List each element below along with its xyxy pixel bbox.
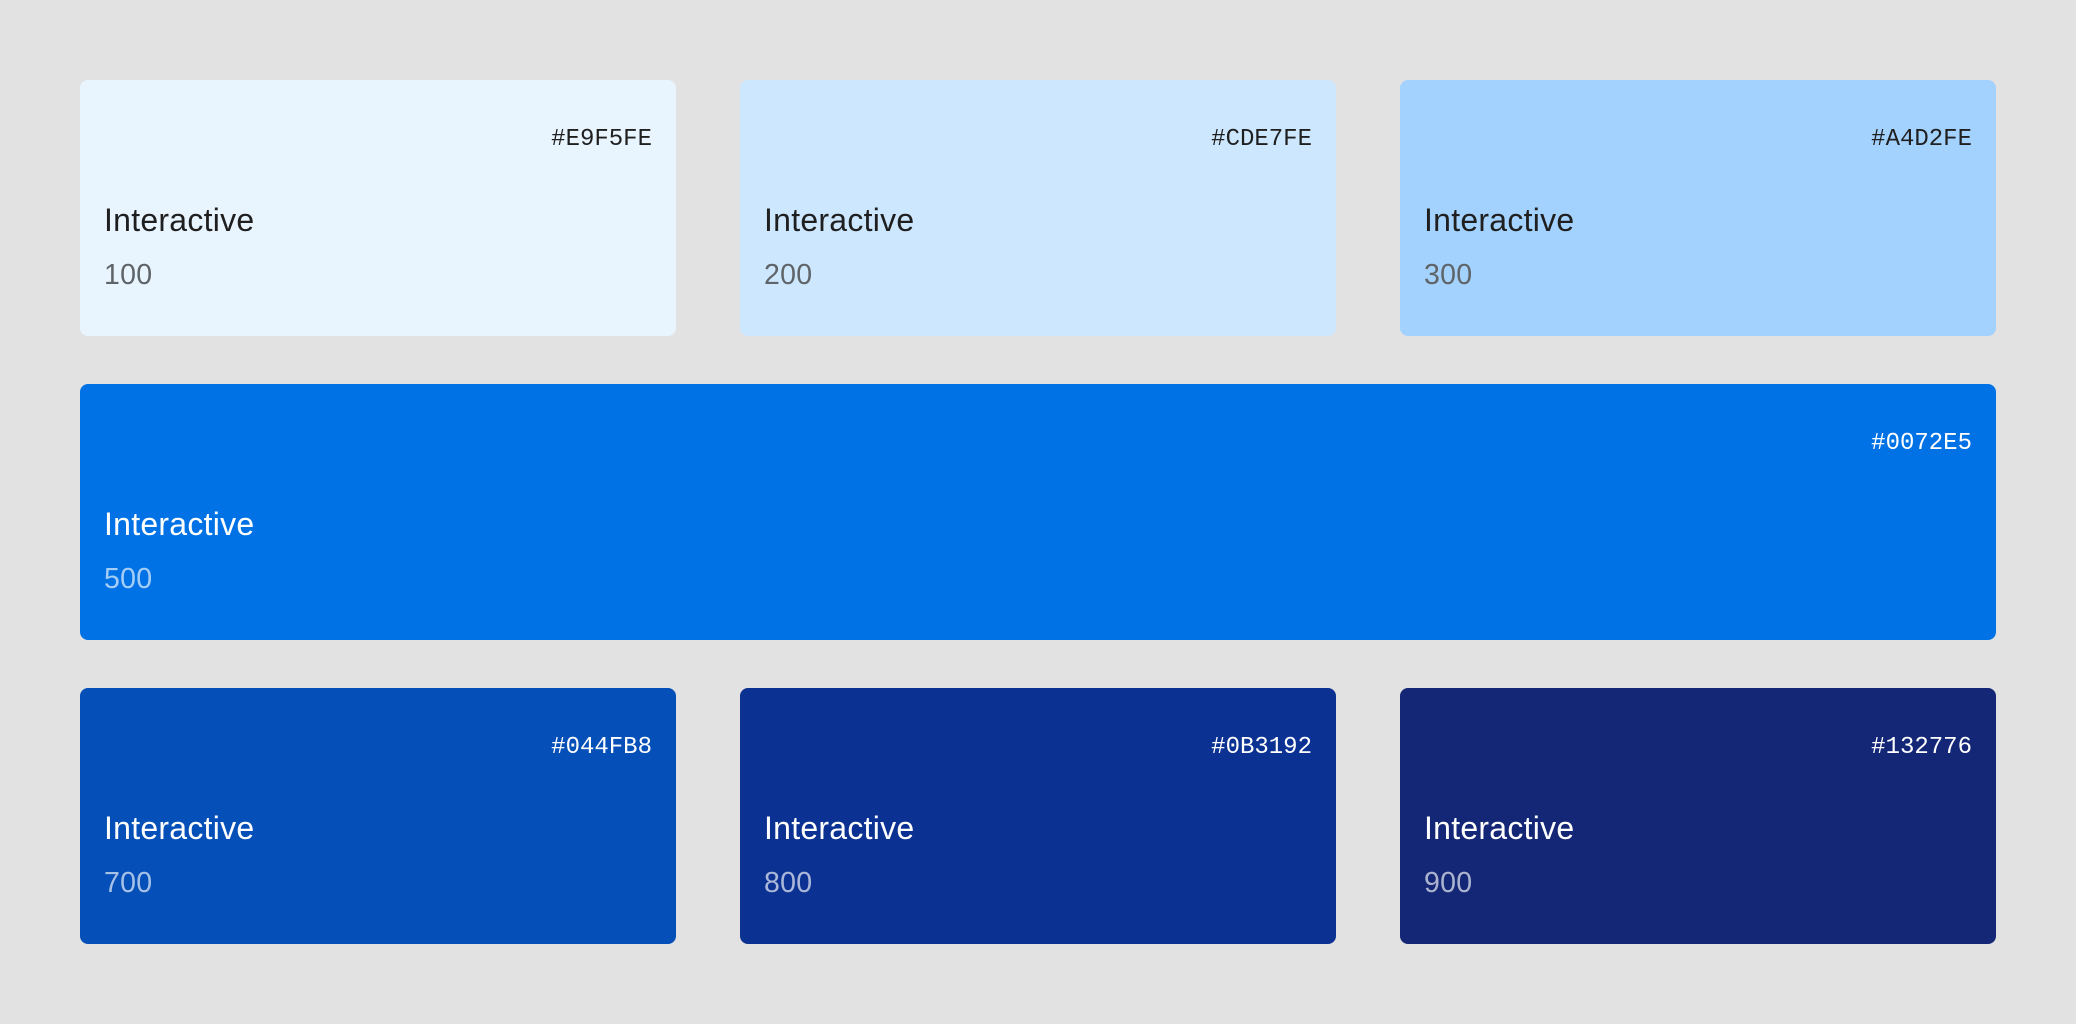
swatch name: Interactive (764, 810, 914, 846)
hex code: #A4D2FE (1871, 126, 1972, 153)
panel: swatch Interactive 700 (80, 688, 676, 944)
swatch name: Interactive (104, 810, 254, 846)
swatch name: Interactive (104, 506, 254, 542)
hex code: #0B3192 (1211, 734, 1312, 761)
panel: swatch Interactive 200 (740, 80, 1336, 336)
panel: swatch Interactive 500 (80, 384, 1996, 640)
hex code: #E9F5FE (551, 126, 652, 153)
swatch shade number: 900 (1424, 867, 1472, 899)
hex code: #044FB8 (551, 734, 652, 761)
swatch name: Interactive (104, 202, 254, 238)
hex code: #132776 (1871, 734, 1972, 761)
swatch shade number: 200 (764, 259, 812, 291)
panel: swatch Interactive 100 (80, 80, 676, 336)
swatch name: Interactive (764, 202, 914, 238)
hex code: #CDE7FE (1211, 126, 1312, 153)
panel: swatch Interactive 300 (1400, 80, 1996, 336)
swatch shade number: 800 (764, 867, 812, 899)
swatch shade number: 100 (104, 259, 152, 291)
panel: swatch Interactive 800 (740, 688, 1336, 944)
swatch name: Interactive (1424, 202, 1574, 238)
swatch shade number: 700 (104, 867, 152, 899)
swatch shade number: 500 (104, 563, 152, 595)
hex code: #0072E5 (1871, 430, 1972, 457)
swatch name: Interactive (1424, 810, 1574, 846)
panel: swatch Interactive 900 (1400, 688, 1996, 944)
swatch shade number: 300 (1424, 259, 1472, 291)
